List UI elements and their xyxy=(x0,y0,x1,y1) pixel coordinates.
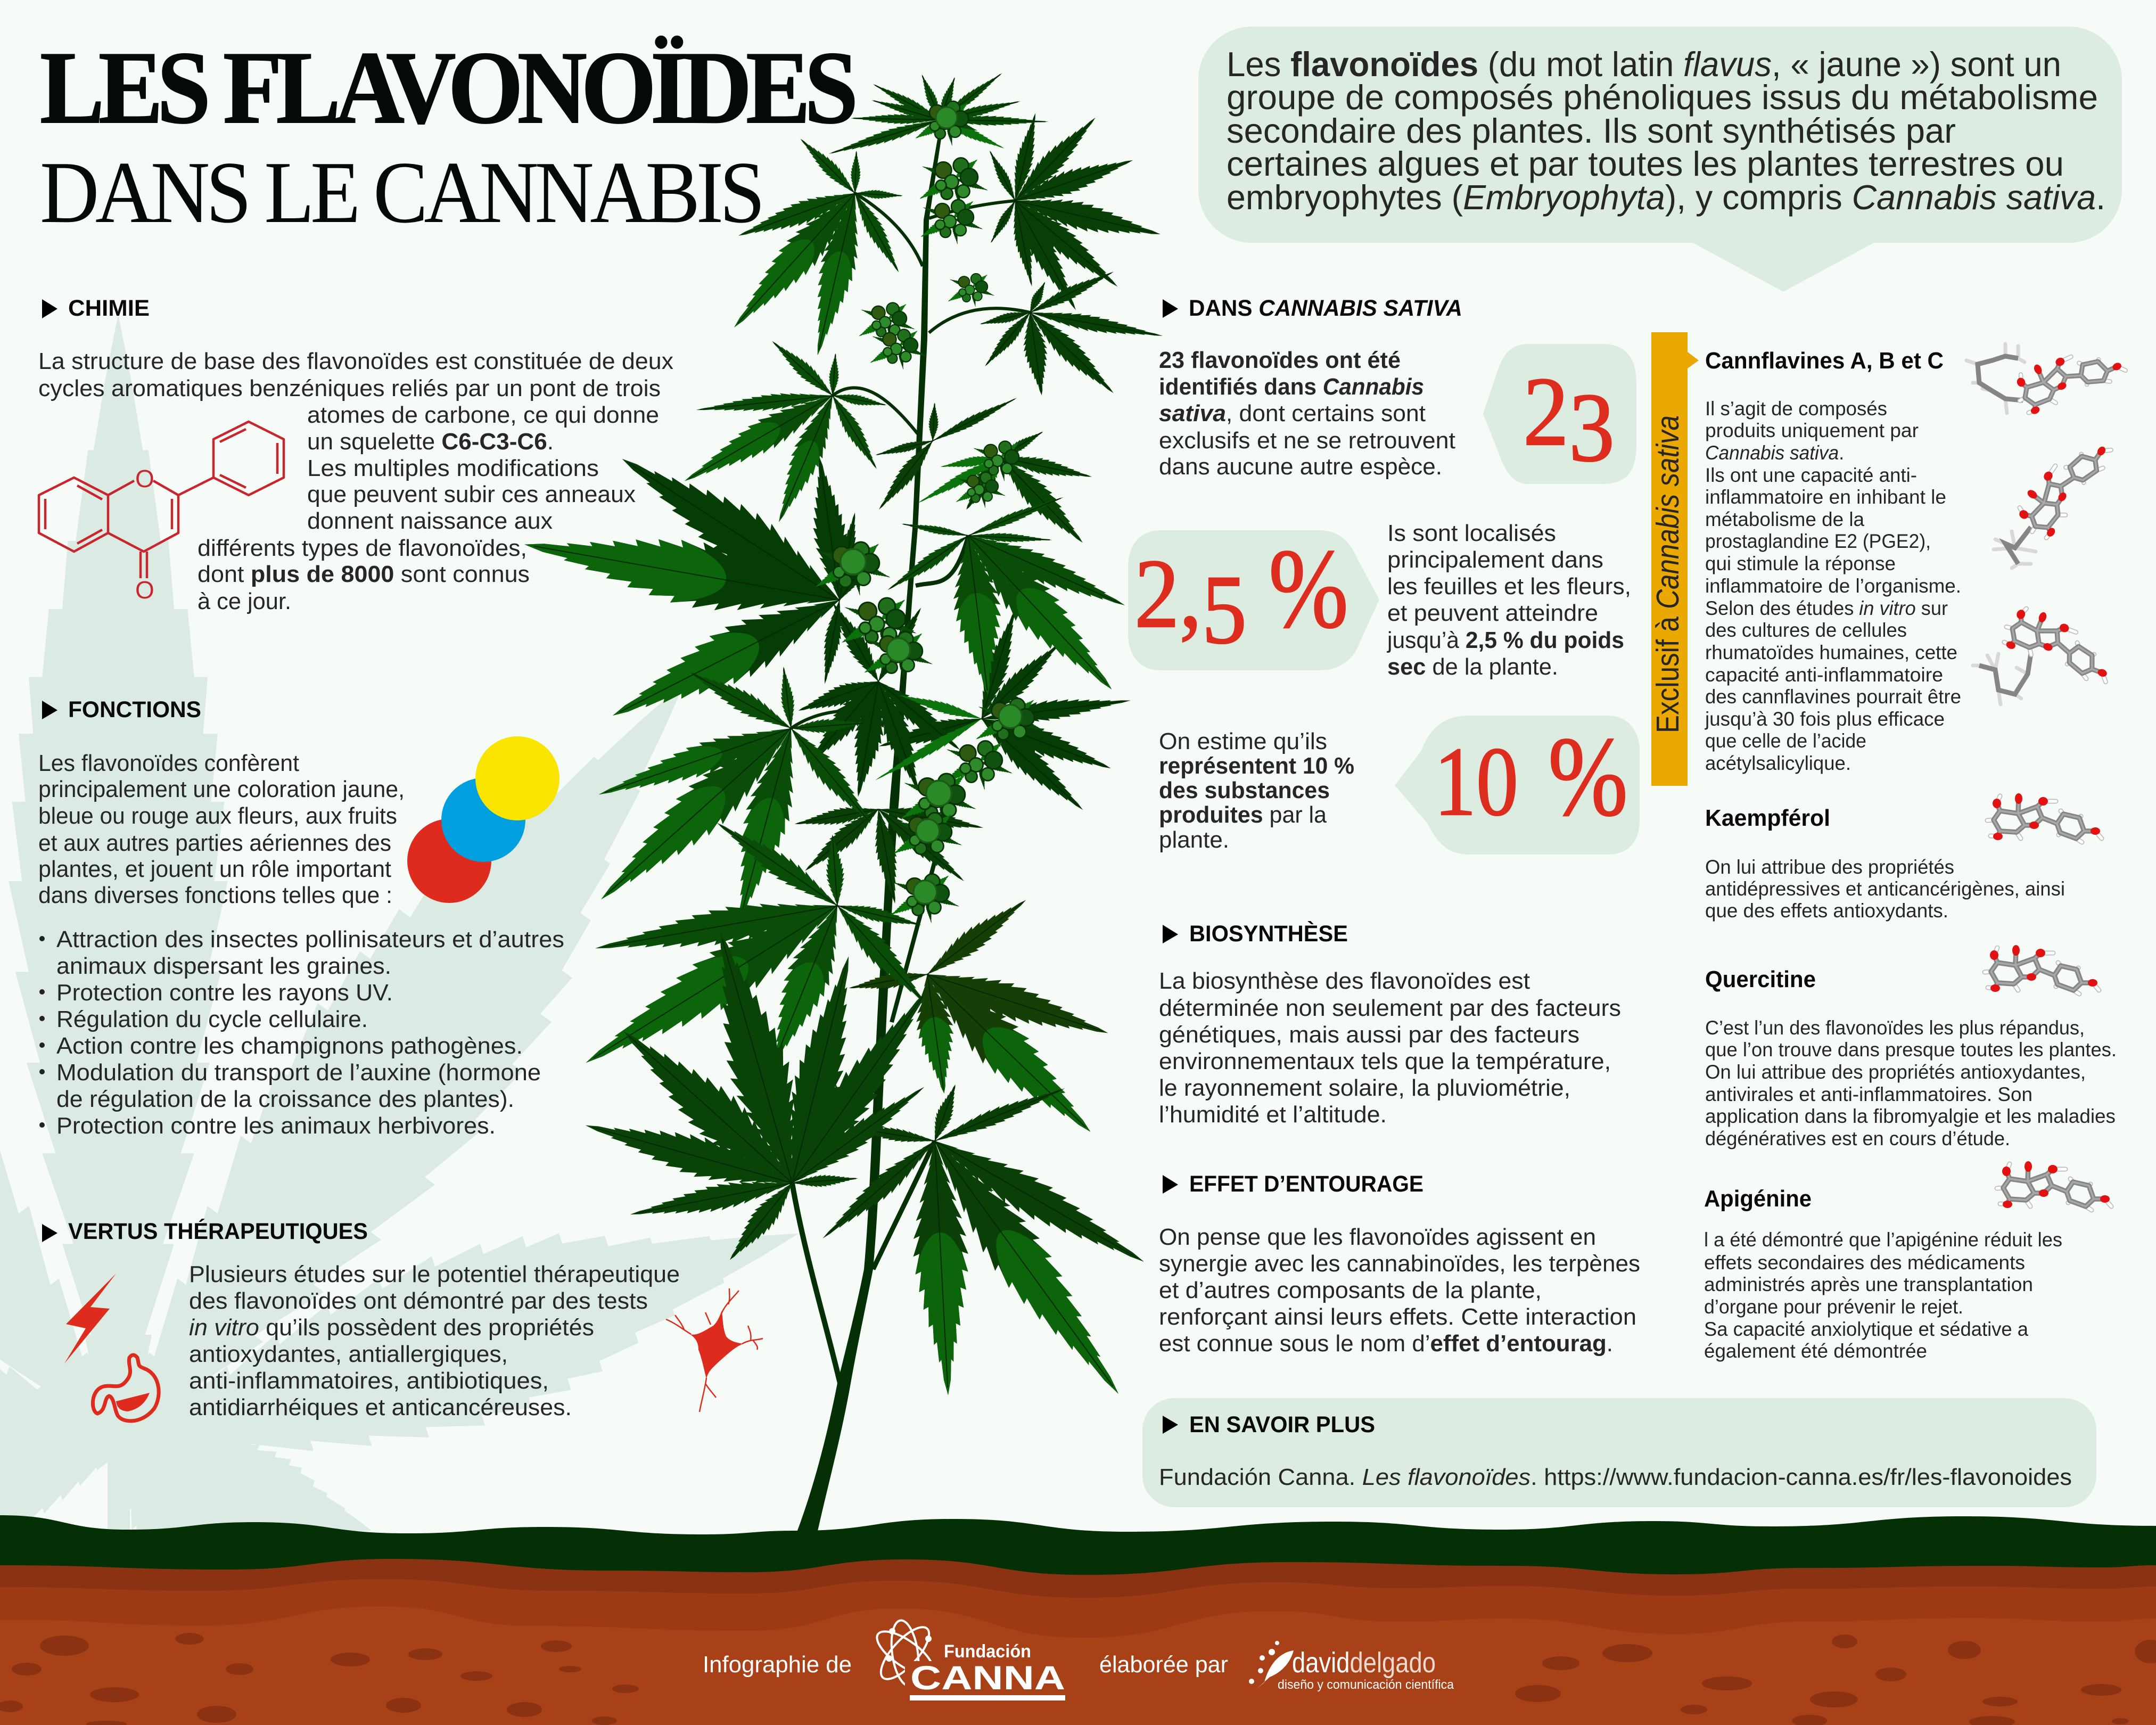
leaf: center right cluster xyxy=(876,606,1132,820)
panel: chimie: un squelette C6-C3-C6. xyxy=(307,429,554,455)
panel: effet d'entourage: EFFET D’ENTOURAGE xyxy=(1189,1171,1423,1197)
icon: flavone molecule: O xyxy=(135,576,154,604)
list: roles: Action contre les champignons pathogènes. xyxy=(56,1033,523,1059)
panel: apigénine: d’organe pour prévenir le rejet. xyxy=(1704,1296,1963,1318)
panel: biosynthèse: génétiques, mais aussi par des facteurs xyxy=(1159,1022,1579,1048)
icon: flavone molecule xyxy=(39,422,284,604)
icon: flavone molecule: O xyxy=(135,465,154,492)
panel: cannflavines: métabolisme de la xyxy=(1705,508,1864,530)
number: 2,5 % xyxy=(1134,526,1348,664)
panel: cannflavines: inflammatoire en inhibant le xyxy=(1705,486,1946,508)
panel: effet d'entourage: synergie avec les cannabinoïdes, les terpènes xyxy=(1159,1251,1640,1277)
intro speech bubble: embryophytes (Embryophyta), y compris Cannabis sativa. xyxy=(1227,178,2105,217)
panel: en savoir plus: Fundación Canna. Les flavonoïdes. https://www.fundacion-canna.es/fr/les-flavonoides xyxy=(1159,1464,2072,1490)
leaf: left second tier xyxy=(663,335,887,539)
bubble: 2,5 % xyxy=(1128,530,1379,670)
leaf: lower left tier xyxy=(566,662,880,944)
panel: vertus thérapeutiques: in vitro qu’ils possèdent des propriétés xyxy=(189,1315,594,1341)
panel: chimie: dont plus de 8000 sont connus xyxy=(198,561,530,587)
leaf: center third tier xyxy=(873,393,1019,515)
icon: lightning bolt xyxy=(64,1274,116,1363)
logo: fundación canna: CANNA xyxy=(910,1660,1065,1697)
molecule: apigénine xyxy=(1997,1161,2111,1210)
panel: chimie: Les multiples modifications xyxy=(307,455,599,481)
panel: fonctions: plantes, et jouent un rôle important xyxy=(38,856,391,882)
leaf: dense lower center fan xyxy=(793,800,985,906)
panel: cannflavines: que celle de l’acide xyxy=(1705,730,1866,752)
panel: effet d'entourage: et d’autres composants de la plante, xyxy=(1159,1277,1542,1303)
plant stems xyxy=(791,139,1030,1533)
panel: chimie: cycles aromatiques benzéniques reliés par un pont de trois xyxy=(38,375,661,401)
leaf: upper left xyxy=(709,134,907,373)
number: 10 % xyxy=(1434,714,1628,840)
stat: 23 flavonoïdes: 23 flavonoïdes ont été xyxy=(1159,347,1401,373)
number: 2,5 %: 2, xyxy=(1134,539,1208,648)
exclusive bar: Exclusif à Cannabis sativa xyxy=(1650,415,1685,733)
panel: cannflavines xyxy=(1705,332,2127,774)
stat: 2,5 %: sec de la plante. xyxy=(1387,654,1558,680)
panel: fonctions: Les flavonoïdes confèrent xyxy=(38,750,299,776)
panel: quercitine: que l’on trouve dans presque toutes les plantes. xyxy=(1705,1039,2117,1061)
panel: cannflavines: acétylsalicylique. xyxy=(1705,752,1851,774)
stat: 2,5 %: et peuvent atteindre xyxy=(1387,600,1598,626)
footer credits: Infographie de xyxy=(703,1652,852,1678)
panel: cannflavines: capacité anti-inflammatoire xyxy=(1705,664,1943,686)
panel: chimie: La structure de base des flavonoïdes est constituée de deux xyxy=(38,348,673,374)
panel: vertus thérapeutiques: VERTUS THÉRAPEUTIQUES xyxy=(68,1219,368,1244)
panel: cannflavines: Il s’agit de composés xyxy=(1705,398,1887,420)
number: 23: 3 xyxy=(1569,373,1615,482)
leaf: top crown xyxy=(827,69,1049,160)
panel: cannflavines: qui stimule la réponse xyxy=(1705,553,1896,574)
panel: biosynthèse: environnementaux tels que la température, xyxy=(1159,1048,1611,1074)
panel: apigénine: également été démontrée xyxy=(1704,1340,1927,1362)
stat: 2,5 %: jusqu’à 2,5 % du poids xyxy=(1386,627,1624,653)
molecule: kaempférol xyxy=(1987,793,2102,842)
panel: apigénine: Sa capacité anxiolytique et sédative a xyxy=(1704,1318,2028,1340)
section heading: dans cannabis sativa: DANS CANNABIS SATIVA xyxy=(1189,295,1462,321)
panel: kaempférol: que des effets antioxydants. xyxy=(1705,900,1948,922)
logo: david delgado xyxy=(1249,1641,1454,1692)
stat: 2,5 %: les feuilles et les fleurs, xyxy=(1387,573,1631,599)
stat: 10 %: On estime qu’ils xyxy=(1159,728,1327,754)
molecule: quercitine xyxy=(1985,945,2099,994)
panel: quercitine: On lui attribue des propriétés antioxydantes, xyxy=(1705,1061,2086,1083)
icon: stomach xyxy=(93,1355,159,1421)
cannabis plant illustration xyxy=(492,69,1164,1533)
panel: en savoir plus xyxy=(1142,1398,2096,1507)
panel: cannflavines: inflammatoire de l’organisme. xyxy=(1705,575,1961,597)
panel: biosynthèse: le rayonnement solaire, la pluviométrie, xyxy=(1159,1075,1570,1101)
intro speech bubble: certaines algues et par toutes les plantes terrestres ou xyxy=(1227,144,2064,183)
number: 2,5 %: % xyxy=(1269,526,1348,652)
panel: vertus thérapeutiques xyxy=(42,1219,763,1421)
panel: effet d'entourage: renforçant ainsi leurs effets. Cette interaction xyxy=(1159,1304,1636,1330)
stat: 10 %: représentent 10 % xyxy=(1159,753,1354,779)
panel: fonctions: et aux autres parties aériennes des xyxy=(38,830,391,856)
panel: vertus thérapeutiques: Plusieurs études sur le potentiel thérapeutique xyxy=(189,1261,680,1287)
leaf: right fourth tier xyxy=(884,492,1143,720)
stat: 23 flavonoïdes: sativa, dont certains sont xyxy=(1159,400,1426,426)
panel: kaempférol: Kaempférol xyxy=(1705,805,1830,831)
stat: 10 %: des substances xyxy=(1159,777,1330,803)
panel: quercitine: antivirales et anti-inflammatoires. Son xyxy=(1705,1083,2032,1105)
panel: effet d'entourage xyxy=(1159,1171,1640,1357)
leaf: large left fan xyxy=(492,435,881,753)
list: roles: Modulation du transport de l’auxine (hormone xyxy=(56,1059,541,1086)
footer credits xyxy=(703,1619,1454,1701)
panel: chimie: donnent naissance aux xyxy=(307,508,553,534)
ground and soil layers xyxy=(0,1515,2156,1725)
panel: apigénine: administrés après une transplantation xyxy=(1704,1274,2033,1295)
panel: cannflavines: Cannflavines A, B et C xyxy=(1705,348,1944,374)
leaf: large lower left fan xyxy=(580,923,943,1268)
leaf: light blades center xyxy=(873,689,984,785)
icon: colour circles xyxy=(407,736,559,903)
logo: fundación canna: Fundación xyxy=(944,1641,1031,1662)
panel: cannflavines: des cultures de cellules xyxy=(1705,619,1907,641)
background cannabis leaf watermark xyxy=(0,314,825,1645)
stat: 23 flavonoïdes: exclusifs et ne se retrouvent xyxy=(1159,428,1455,454)
leaf: dense center fan xyxy=(795,598,967,799)
panel: cannflavines: Ils ont une capacité anti- xyxy=(1705,464,1917,486)
leaf: right third tier xyxy=(915,427,1093,552)
panel: quercitine: application dans la fibromyalgie et les maladies xyxy=(1705,1105,2116,1127)
logo: david delgado: daviddelgado xyxy=(1292,1647,1436,1679)
panel: apigénine: Apigénine xyxy=(1704,1186,1812,1212)
molecule: cannflavine B xyxy=(1994,425,2114,568)
panel: cannflavines: prostaglandine E2 (PGE2), xyxy=(1705,530,1931,552)
number: 2,5 %: 5 xyxy=(1202,555,1247,664)
bubble: 10 % xyxy=(1395,716,1640,855)
exclusive bar xyxy=(1650,332,1699,786)
stat: 23 flavonoïdes: dans aucune autre espèce. xyxy=(1159,454,1442,480)
panel: quercitine: dégénératives est en cours d’étude. xyxy=(1705,1128,2010,1149)
molecule: cannflavine A xyxy=(1966,332,2127,420)
stat: 23 flavonoïdes xyxy=(1159,344,1636,484)
stat: 10 %: produites par la xyxy=(1159,802,1327,828)
panel: kaempférol: On lui attribue des propriétés xyxy=(1705,856,1954,878)
panel: chimie: différents types de flavonoïdes, xyxy=(198,535,527,561)
list: roles: Protection contre les rayons UV. xyxy=(56,980,393,1006)
list: roles: animaux dispersant les graines. xyxy=(56,953,391,979)
panel: cannflavines: Cannabis sativa. xyxy=(1705,442,1844,464)
footer credits: élaborée par xyxy=(1099,1652,1228,1678)
stat: 2,5 %: principalement dans xyxy=(1387,547,1603,573)
number: 10 %: 10 xyxy=(1434,727,1518,836)
panel: kaempférol xyxy=(1705,793,2102,922)
panel: vertus thérapeutiques: anti-inflammatoires, antibiotiques, xyxy=(189,1368,549,1394)
logo: david delgado: diseño y comunicación científica xyxy=(1278,1678,1454,1692)
panel: fonctions: dans diverses fonctions telles que : xyxy=(38,882,392,908)
intro speech bubble: Les flavonoïdes (du mot latin flavus, « jaune ») sont un xyxy=(1227,45,2061,84)
flower buds xyxy=(812,99,1046,924)
panel: effet d'entourage: est connue sous le nom d’effet d’entourag. xyxy=(1159,1330,1613,1357)
stat: 10 %: plante. xyxy=(1159,827,1229,853)
list: roles: Régulation du cycle cellulaire. xyxy=(56,1006,368,1032)
panel: vertus thérapeutiques: des flavonoïdes ont démontré par des tests xyxy=(189,1288,648,1314)
stat: 10 % xyxy=(1159,714,1640,855)
panel: fonctions xyxy=(38,697,564,1139)
title xyxy=(40,30,854,241)
panel: biosynthèse: BIOSYNTHÈSE xyxy=(1189,921,1348,947)
panel: apigénine: effets secondaires des médicaments xyxy=(1704,1252,2025,1274)
panel: biosynthèse xyxy=(1159,921,1621,1128)
panel: quercitine: C’est l’un des flavonoïdes les plus répandus, xyxy=(1705,1017,2085,1039)
title: DANS LE CANNABIS xyxy=(40,143,761,241)
title: LES FLAVONOÏDES xyxy=(40,30,854,145)
panel: vertus thérapeutiques: antidiarrhéiques et anticancéreuses. xyxy=(189,1394,572,1420)
panel: apigénine xyxy=(1704,1161,2111,1362)
leaf: mid left fan xyxy=(549,812,934,1103)
stat: 2,5 % xyxy=(1128,520,1631,680)
panel: fonctions: FONCTIONS xyxy=(68,697,201,722)
panel: kaempférol: antidépressives et anticancérigènes, ainsi xyxy=(1705,878,2065,900)
panel: fonctions: bleue ou rouge aux fleurs, aux fruits xyxy=(38,803,397,829)
panel: cannflavines: jusqu’à 30 fois plus efficace xyxy=(1705,708,1945,730)
panel: quercitine xyxy=(1705,945,2117,1149)
bubble: 23 xyxy=(1483,344,1636,484)
intro speech bubble xyxy=(1198,27,2122,292)
panel: apigénine: l a été démontré que l’apigénine réduit les xyxy=(1704,1229,2062,1251)
panel: cannflavines: produits uniquement par xyxy=(1705,420,1919,441)
leaf: right middle olive xyxy=(847,891,1124,1165)
intro speech bubble: secondaire des plantes. Ils sont synthétisés par xyxy=(1227,111,1956,150)
panel: chimie: que peuvent subir ces anneaux xyxy=(307,481,636,507)
leaf: upper right xyxy=(985,110,1164,316)
panel: chimie xyxy=(38,295,673,614)
panel: chimie: CHIMIE xyxy=(68,295,150,321)
panel: cannflavines: rhumatoïdes humaines, cette xyxy=(1705,642,1957,663)
panel: vertus thérapeutiques: antioxydantes, antiallergiques, xyxy=(189,1341,508,1367)
intro speech bubble: groupe de composés phénoliques issus du métabolisme xyxy=(1227,78,2098,117)
stat: 23 flavonoïdes: identifiés dans Cannabis xyxy=(1159,374,1424,400)
list: roles: Attraction des insectes pollinisateurs et d’autres xyxy=(56,926,564,952)
number: 10 %: % xyxy=(1548,714,1628,840)
logo: fundación canna xyxy=(870,1619,1065,1701)
number: 23: 2 xyxy=(1523,357,1573,466)
panel: quercitine: Quercitine xyxy=(1705,966,1816,992)
panel: cannflavines: des cannflavines pourrait être xyxy=(1705,686,1961,708)
leaf: right second tier xyxy=(978,266,1164,401)
icon: neuron xyxy=(666,1288,763,1412)
list: roles: de régulation de la croissance des plantes). xyxy=(56,1086,514,1112)
panel: fonctions: principalement une coloration jaune, xyxy=(38,776,405,802)
molecule: cannflavine C xyxy=(1973,602,2121,704)
panel: chimie: à ce jour. xyxy=(198,588,291,614)
panel: biosynthèse: l’humidité et l’altitude. xyxy=(1159,1102,1387,1128)
panel: biosynthèse: La biosynthèse des flavonoïdes est xyxy=(1159,968,1530,994)
stat: 2,5 %: Is sont localisés xyxy=(1387,520,1556,546)
panel: chimie: atomes de carbone, ce qui donne xyxy=(307,402,659,428)
panel: effet d'entourage: On pense que les flavonoïdes agissent en xyxy=(1159,1224,1596,1250)
list: roles xyxy=(39,926,564,1139)
leaf: large lower right fan xyxy=(816,1081,1159,1433)
panel: en savoir plus: EN SAVOIR PLUS xyxy=(1189,1412,1375,1438)
panel: cannflavines: Selon des études in vitro sur xyxy=(1705,597,1948,619)
panel: biosynthèse: déterminée non seulement par des facteurs xyxy=(1159,995,1621,1021)
list: roles: Protection contre les animaux herbivores. xyxy=(56,1113,496,1139)
